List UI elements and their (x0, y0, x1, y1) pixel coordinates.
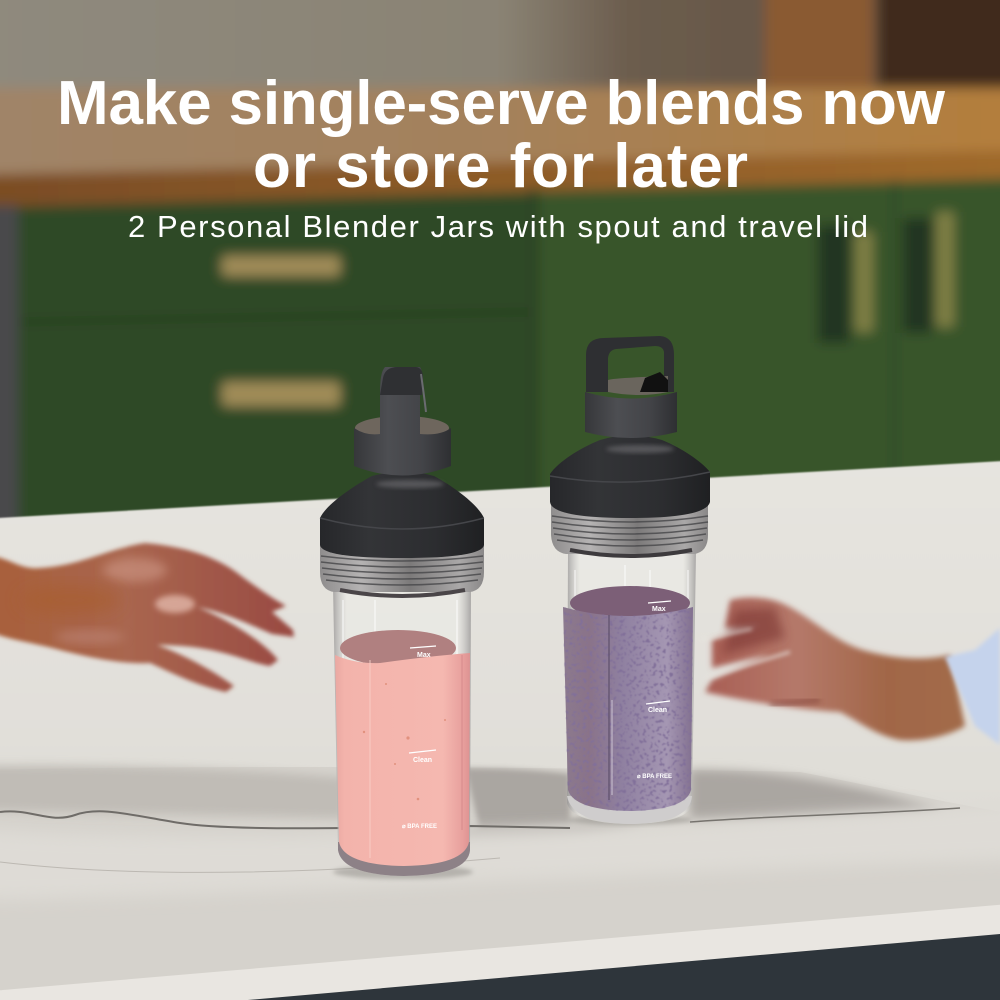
pink smoothie (335, 653, 470, 866)
smoothie top surface (570, 586, 690, 620)
title: Make single-serve blends now (57, 69, 946, 138)
measurement marks: Max (417, 652, 431, 659)
fruit specks (363, 683, 446, 800)
subtitle: 2 Personal Blender Jars with spout and travel lid (128, 209, 868, 244)
purple smoothie (563, 607, 693, 811)
lid handle loop (585, 336, 677, 438)
jar body (567, 550, 696, 824)
jar shadow (333, 865, 473, 879)
lid cap (320, 472, 484, 558)
measurement marks: Clean (648, 707, 667, 714)
measurement marks: Clean (413, 757, 432, 764)
lid cap (550, 436, 710, 518)
title (57, 69, 946, 201)
blueberry speckles (563, 607, 693, 811)
threaded neck (320, 545, 484, 592)
lid handle (354, 367, 451, 476)
right hand (motion blurred) (700, 597, 1000, 745)
shirt cuff (945, 628, 1000, 745)
measurement marks: ⌀ BPA FREE (637, 774, 672, 780)
jar shadow (568, 815, 692, 825)
left hand (motion blurred) (0, 543, 294, 692)
marble countertop (0, 460, 1000, 1000)
jar: pink smoothie (320, 367, 484, 879)
measurement marks (402, 646, 437, 830)
hand highlights (103, 558, 167, 582)
jar body (333, 585, 471, 876)
measurement marks (637, 601, 672, 780)
measurement marks: ⌀ BPA FREE (402, 824, 437, 830)
smoothie top surface (340, 630, 456, 666)
measurement marks: Max (652, 606, 666, 613)
jar: purple smoothie (550, 336, 710, 825)
threaded neck (551, 503, 708, 554)
title: or store for later (253, 132, 748, 201)
